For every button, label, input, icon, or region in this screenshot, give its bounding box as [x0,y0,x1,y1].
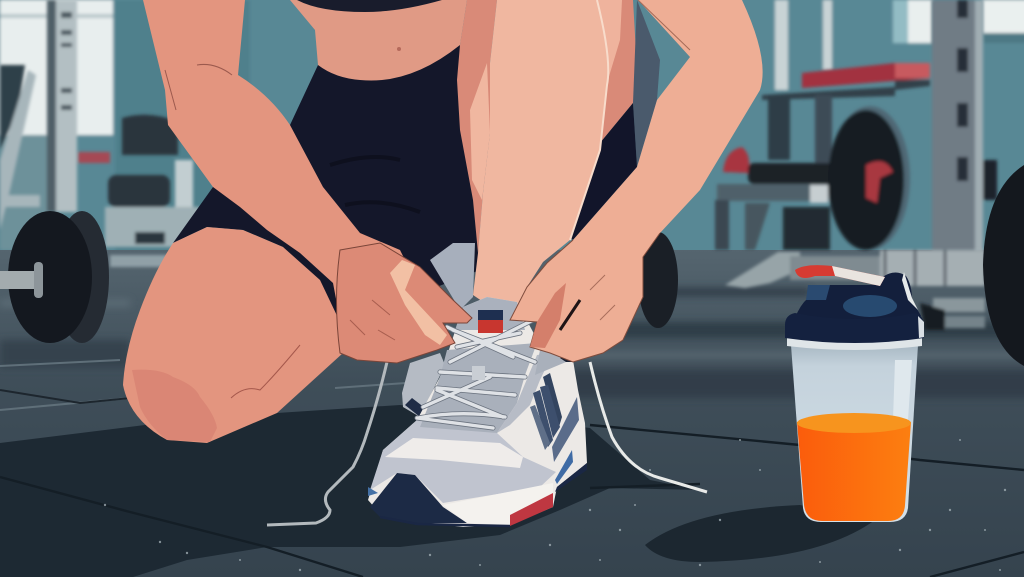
inner thigh shade [457,0,497,253]
laces [417,318,537,428]
torso [290,0,467,81]
barbell [725,250,985,330]
left rack and bench [0,0,200,267]
floor [0,250,1024,577]
toe cap [370,473,467,523]
flip cap [795,265,885,286]
navel [397,47,401,51]
juice surface [797,413,911,433]
right rack, bench and plate [715,0,997,252]
side stripes [543,373,562,430]
lace toggle [472,366,485,380]
midsole [443,483,553,525]
finger gap [560,300,580,330]
floor cracks [0,425,1024,577]
right arm [510,0,763,362]
shaker bottle [785,265,924,522]
upper silhouette [368,297,587,527]
plate behind leg [638,232,678,328]
sports top [297,0,442,12]
cup [791,345,918,522]
back shoe tongue [430,243,475,310]
right barbell plate [983,165,1024,366]
left arm [143,0,420,360]
finger shade [530,283,566,348]
toe blue tick [368,487,378,496]
shoe [267,297,707,527]
toe white panel [385,438,523,468]
gym wall background [0,0,1024,265]
shorts [173,45,480,325]
far leg shade [597,0,637,143]
heel collar [535,350,570,375]
left hand [336,243,472,363]
lace panel [420,343,537,433]
lid rim [785,313,924,343]
lid dome [795,272,921,328]
tongue label [478,310,503,320]
juice body [797,422,911,521]
floor shadow [0,405,700,577]
thigh and knee [123,227,343,443]
back shoe lower [402,353,445,417]
athlete [123,0,763,443]
right hand [510,233,660,362]
shaker shadow [645,505,875,562]
left dumbbell [0,211,109,343]
lid lip [787,338,922,350]
shorts far side [633,0,660,167]
cup highlight [893,360,912,420]
shoelaces loose [267,362,387,525]
floor speckles [104,439,1006,571]
red heel sole [510,493,553,526]
finger highlights [390,260,447,345]
tongue [455,297,525,330]
shin [473,0,608,320]
kneecap shade [132,370,217,442]
toe grey base [370,420,556,503]
eyelet panel [497,353,553,433]
lid highlight [843,295,897,317]
knee crease [231,345,300,398]
heel blue stripe [555,450,573,484]
sole edge [380,517,510,526]
side panel [552,397,579,462]
